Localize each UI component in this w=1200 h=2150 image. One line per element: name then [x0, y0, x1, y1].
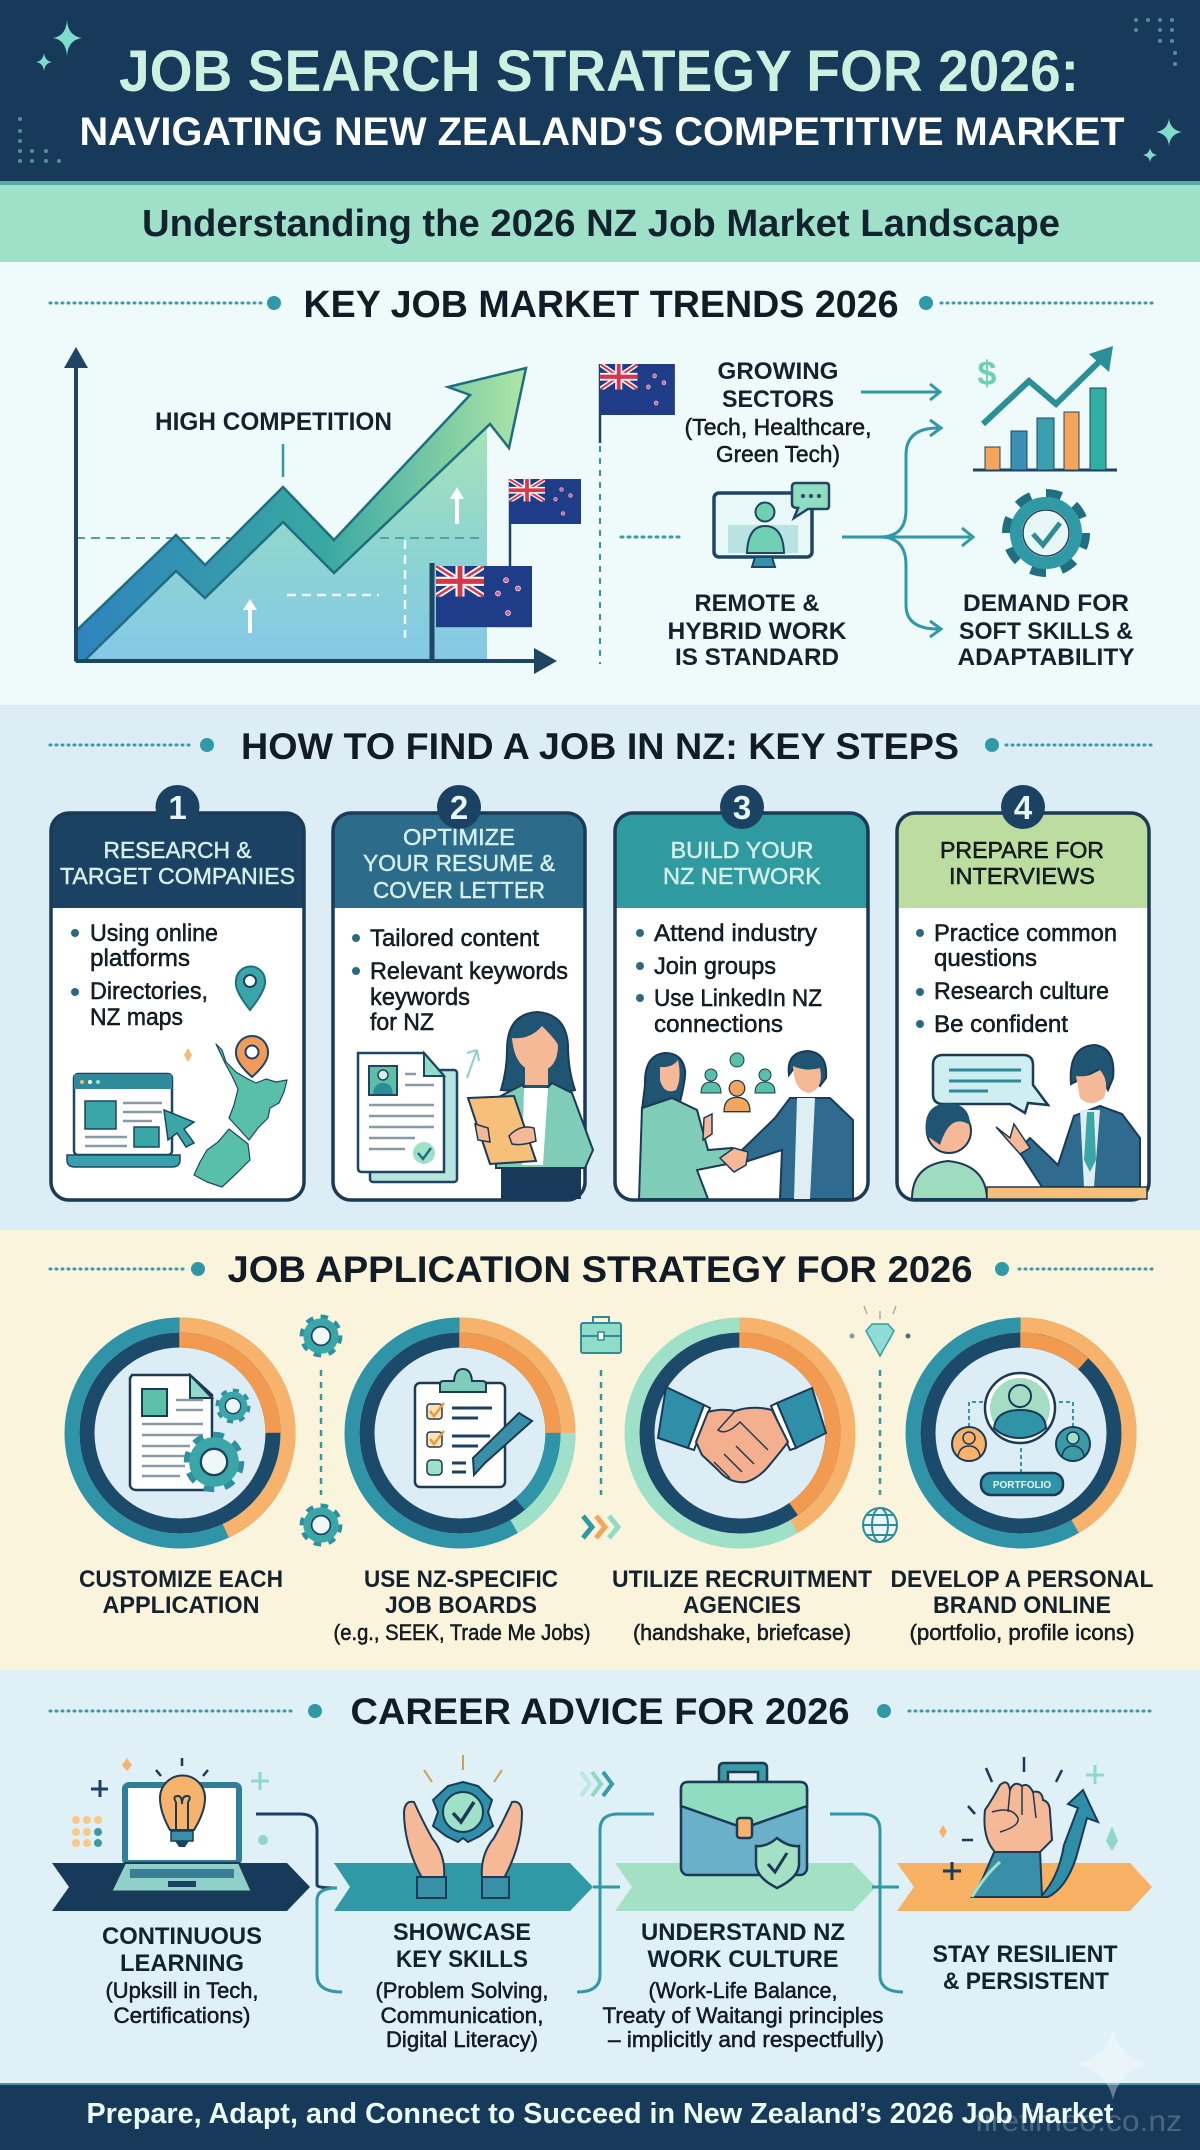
- text: growing sectors: Green Tech): [716, 441, 840, 467]
- text: understand NZ work culture: (Work-Life Balance,: [648, 1978, 838, 2003]
- text: growing sectors: GROWING: [718, 358, 838, 385]
- card 1: research: platforms: [90, 945, 190, 972]
- icon: NZ map: [194, 1044, 287, 1187]
- heading: application: [50, 1249, 1152, 1290]
- text: continuous learning: LEARNING: [120, 1950, 244, 1977]
- icon: bar chart with dollar: $: [978, 355, 997, 393]
- text: use NZ-specific job boards: USE NZ-SPECIFIC: [364, 1566, 558, 1593]
- card 1: research: RESEARCH &: [104, 837, 252, 863]
- text: use NZ-specific job boards: JOB BOARDS: [385, 1592, 537, 1619]
- text: use NZ-specific job boards: (e.g., SEEK, Trade Me Jobs): [334, 1620, 590, 1645]
- icon: resume document: [358, 1050, 479, 1182]
- text: use NZ-specific job boards: [334, 1566, 590, 1645]
- card 4: interviews: questions: [934, 945, 1037, 972]
- line chart: high competition: HIGH COMPETITION: [155, 408, 392, 436]
- icon: NZ flag medium: [509, 479, 581, 566]
- ribbon: step chevrons: [52, 1863, 1152, 1911]
- heading: career advice: [50, 1691, 1152, 1732]
- text: understand NZ work culture: [602, 1919, 884, 2052]
- text: stay resilient: STAY RESILIENT: [932, 1941, 1118, 1968]
- panel: header: [0, 0, 1200, 185]
- text: remote and hybrid: IS STANDARD: [675, 644, 839, 671]
- card 4: interviews: INTERVIEWS: [949, 863, 1095, 889]
- card 3: network: 3: [733, 789, 751, 826]
- card 1: research: TARGET COMPANIES: [60, 863, 295, 889]
- heading: steps: [50, 726, 1152, 767]
- title: [80, 39, 1124, 154]
- text: utilize recruitment agencies: AGENCIES: [683, 1592, 801, 1619]
- text: utilize recruitment agencies: UTILIZE RECRUITMENT: [612, 1566, 872, 1593]
- button: portfolio: PORTFOLIO: [993, 1480, 1051, 1491]
- icon: NZ flag large: [432, 563, 532, 661]
- text: develop a personal brand: BRAND ONLINE: [933, 1592, 1111, 1619]
- text: develop a personal brand: [890, 1566, 1154, 1645]
- text: growing sectors: [684, 358, 872, 467]
- card 3: network: [615, 785, 868, 1200]
- icon: table: [987, 1187, 1147, 1199]
- text: customize each application: [79, 1566, 283, 1619]
- heading: trends: [50, 284, 1152, 326]
- card 4: interviews: PREPARE FOR: [940, 837, 1104, 863]
- card 4: interviews: [897, 785, 1149, 1200]
- icon: bar chart with dollar: [973, 346, 1117, 470]
- icon: raised fist with arrow: [939, 1757, 1118, 1897]
- icon: handshake: [658, 1387, 826, 1482]
- card 2: resume: Tailored content: [370, 925, 539, 952]
- text: showcase key skills: SHOWCASE: [393, 1919, 531, 1946]
- icon: network people: [701, 1053, 775, 1112]
- card 2: resume: [333, 785, 593, 1200]
- panel: footer: [0, 2083, 1200, 2150]
- text: understand NZ work culture: UNDERSTAND NZ: [641, 1919, 845, 1946]
- icon: document with gears: [130, 1375, 246, 1490]
- heading: application: JOB APPLICATION STRATEGY FOR 2026: [228, 1249, 972, 1290]
- panel: application strategy: [0, 1230, 1200, 1670]
- icon column: diamond and globe: [850, 1306, 910, 1542]
- text: utilize recruitment agencies: [612, 1566, 872, 1645]
- card 3: network: Join groups: [654, 953, 776, 980]
- connectors between steps: [256, 1814, 903, 1992]
- illustration: candidate: [912, 1103, 987, 1199]
- icon column: briefcase and chevrons: [581, 1317, 621, 1538]
- icon: hands with badge: [404, 1755, 522, 1898]
- text: develop a personal brand: (portfolio, profile icons): [910, 1620, 1134, 1645]
- icon: clipboard and pencil: [415, 1369, 532, 1487]
- connector: dotted to monitor: [621, 536, 683, 538]
- text: showcase key skills: [376, 1919, 548, 2052]
- arrow: sectors to chart: [861, 384, 940, 400]
- card 3: network: Use LinkedIn NZ: [654, 985, 822, 1012]
- card 2: resume: 2: [450, 789, 468, 826]
- card 1: research: NZ maps: [90, 1004, 183, 1031]
- text: showcase key skills: KEY SKILLS: [396, 1946, 528, 1973]
- card 4: interviews: Research culture: [934, 978, 1109, 1005]
- icon: NZ flag top: [600, 364, 675, 664]
- ring 4: personal brand: [913, 1325, 1129, 1541]
- card 2: resume: OPTIMIZE: [403, 824, 515, 850]
- illustration: woman shaking hands: [639, 1053, 732, 1199]
- icon: monitor remote work: [714, 483, 829, 567]
- title: JOB SEARCH STRATEGY FOR 2026:: [119, 39, 1079, 104]
- card 3: network: BUILD YOUR: [670, 837, 814, 863]
- panel: footer: Prepare, Adapt, and Connect to Succeed in New Zealand’s 2026 Job Market: [86, 2098, 1114, 2130]
- text: demand for soft skills: DEMAND FOR: [963, 590, 1129, 617]
- card 3: network: Attend industry: [654, 920, 817, 947]
- decoration dots left: [18, 117, 61, 163]
- card 1: research: Directories,: [90, 978, 208, 1005]
- card 2: resume: keywords: [370, 984, 470, 1011]
- text: understand NZ work culture: Treaty of Waitangi principles: [602, 2003, 884, 2028]
- text: remote and hybrid: REMOTE &: [694, 590, 820, 617]
- text: remote and hybrid: HYBRID WORK: [668, 618, 847, 645]
- icon: watermark star: [1077, 2028, 1148, 2100]
- ring 1: customize: [72, 1325, 288, 1541]
- text: develop a personal brand: DEVELOP A PERSONAL: [890, 1566, 1154, 1593]
- illustration: interviewer: [996, 1045, 1140, 1187]
- card 3: network: connections: [654, 1011, 783, 1038]
- text: continuous learning: (Upksill in Tech,: [106, 1978, 258, 2003]
- icon: header stars right: [1143, 118, 1182, 162]
- text: showcase key skills: Communication,: [380, 2003, 544, 2028]
- text: customize each application: CUSTOMIZE EACH: [79, 1566, 283, 1593]
- text: customize each application: APPLICATION: [102, 1592, 260, 1619]
- text: utilize recruitment agencies: (handshake, briefcase): [633, 1620, 851, 1645]
- heading: trends: KEY JOB MARKET TRENDS 2026: [304, 284, 898, 326]
- icon column: gears: [304, 1320, 338, 1542]
- card 4: interviews: Be confident: [934, 1011, 1068, 1038]
- card 2: resume: Relevant keywords: [370, 958, 568, 985]
- card 2: resume: YOUR RESUME &: [363, 850, 555, 876]
- card 4: interviews: 4: [1014, 789, 1033, 826]
- card 1: research: [51, 785, 304, 1200]
- card 4: interviews: Practice common: [934, 920, 1117, 947]
- icon: briefcase with shield: [681, 1763, 807, 1888]
- icon: header stars left: [36, 20, 82, 71]
- panel: career advice: [0, 1670, 1200, 2083]
- arrow: branching from monitor: [842, 420, 973, 637]
- title: NAVIGATING NEW ZEALAND'S COMPETITIVE MARKET: [80, 110, 1124, 154]
- panel: key steps: [0, 705, 1200, 2150]
- decoration dots right: [1134, 18, 1177, 66]
- card 1: research: Using online: [90, 920, 218, 947]
- text: continuous learning: Certifications): [114, 2003, 250, 2028]
- icon: profile network: [952, 1373, 1090, 1495]
- card 2: resume: for NZ: [370, 1009, 434, 1036]
- heading: career advice: CAREER ADVICE FOR 2026: [350, 1691, 850, 1732]
- icon: chevrons: [581, 1772, 612, 1796]
- line chart: high competition: [64, 347, 557, 674]
- card 2: resume: COVER LETTER: [373, 877, 545, 903]
- text: showcase key skills: Digital Literacy): [386, 2027, 538, 2052]
- icon: speech bubble: [933, 1055, 1048, 1113]
- watermark text: firetimeo.co.nz: [975, 2105, 1182, 2138]
- illustration: woman with folder: [468, 1012, 593, 1199]
- text: continuous learning: CONTINUOUS: [102, 1923, 262, 1950]
- heading: steps: HOW TO FIND A JOB IN NZ: KEY STEPS: [241, 726, 959, 767]
- card 1: research: 1: [168, 789, 187, 826]
- icon: teal map pin: [236, 966, 265, 1010]
- text: stay resilient: & PERSISTENT: [943, 1968, 1109, 1995]
- card 3: network: NZ NETWORK: [663, 863, 822, 889]
- icon: laptop with cursor: [67, 1048, 194, 1167]
- icon: orange map pin: [236, 1036, 268, 1077]
- text: showcase key skills: (Problem Solving,: [376, 1978, 548, 2003]
- panel: subtitle band: Understanding the 2026 NZ Job Market Landscape: [142, 203, 1060, 245]
- panel: subtitle band: [0, 185, 1200, 262]
- text: demand for soft skills: SOFT SKILLS &: [959, 618, 1133, 645]
- text: understand NZ work culture: – implicitly and respectfully): [608, 2027, 884, 2052]
- text: continuous learning: [102, 1923, 262, 2028]
- text: remote and hybrid: [668, 590, 847, 671]
- text: growing sectors: SECTORS: [722, 386, 834, 413]
- text: understand NZ work culture: WORK CULTURE: [648, 1946, 838, 1973]
- panel: key job market trends: [0, 262, 1200, 705]
- text: growing sectors: (Tech, Healthcare,: [684, 414, 872, 440]
- text: demand for soft skills: [958, 590, 1134, 671]
- icon: laptop and light bulb: [72, 1758, 269, 1892]
- text: demand for soft skills: ADAPTABILITY: [958, 644, 1134, 671]
- icon: gear with check: [1010, 497, 1082, 569]
- ring 3: recruitment agencies: [632, 1325, 848, 1541]
- ring 2: NZ job boards: [352, 1325, 568, 1541]
- illustration: man shaking hands: [720, 1051, 853, 1199]
- text: stay resilient: [932, 1941, 1118, 1995]
